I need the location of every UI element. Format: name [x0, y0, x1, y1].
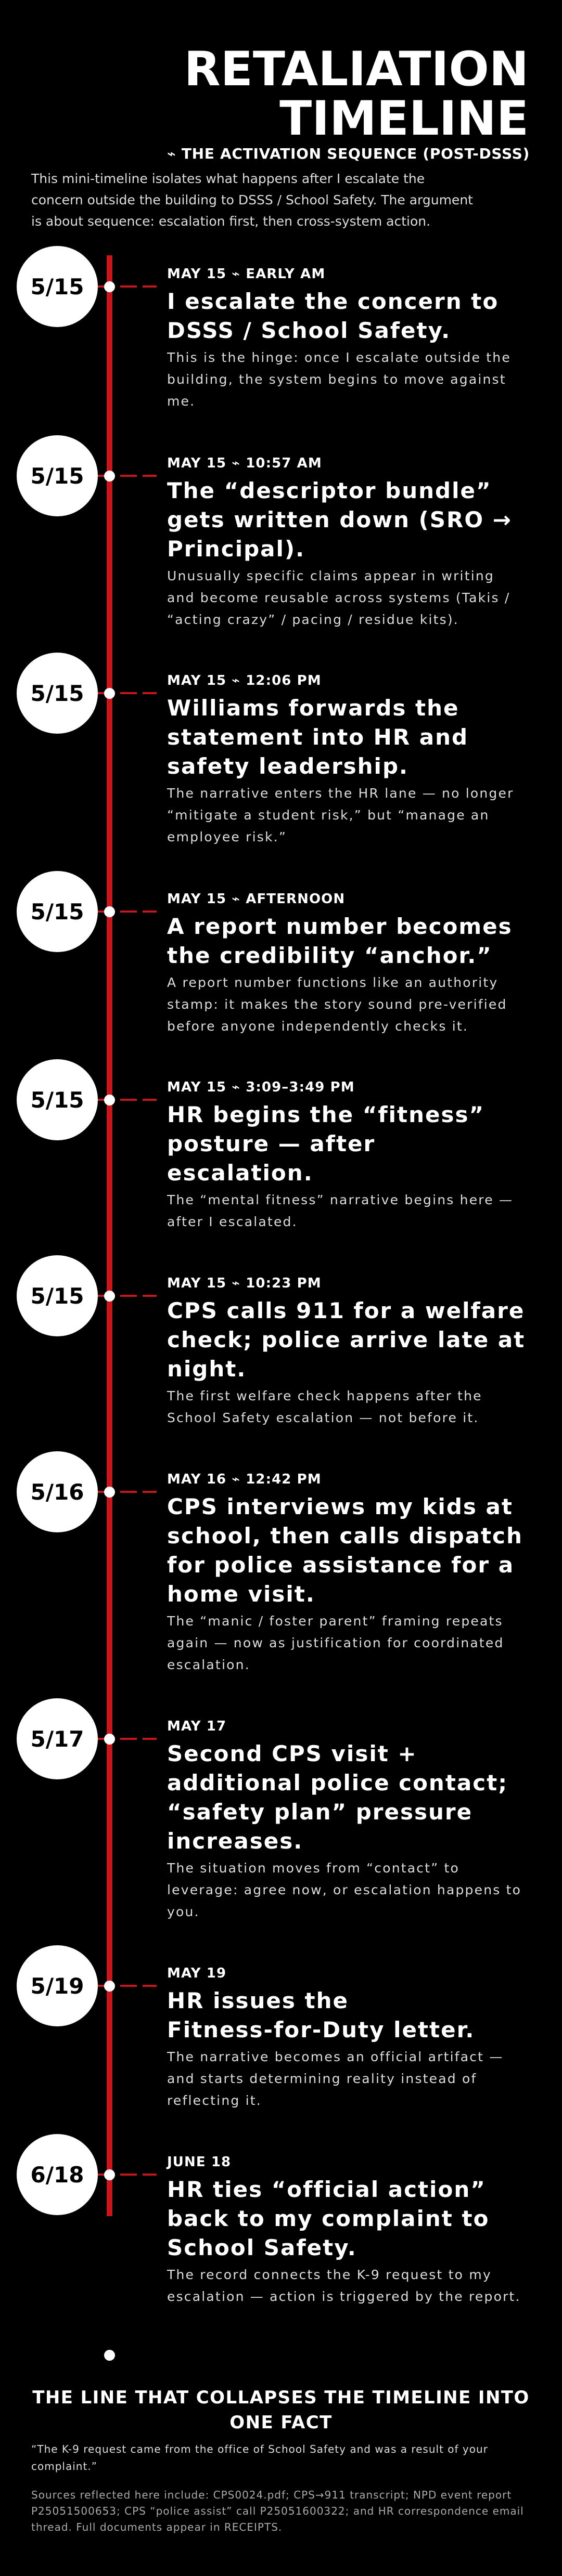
closing heading: [32, 2387, 530, 2433]
intro text: [31, 171, 473, 229]
entry text: A report number functions like an authority: [167, 975, 498, 990]
entry: 5/15 early am: [17, 246, 511, 409]
entry text: stamp: it makes the story sound pre-verified: [167, 997, 507, 1012]
entry text: The “descriptor bundle”: [167, 478, 492, 503]
entry: 5/16 12:42 pm: [17, 1451, 523, 1672]
entry text: MAY 15 ⌁ 12:06 PM: [167, 673, 322, 688]
date circle: 5/15: [30, 463, 84, 489]
entry text: Unusually specific claims appear in writing: [167, 568, 494, 583]
entry text: [167, 891, 513, 1034]
quote: complaint.”: [31, 2460, 97, 2473]
entry text: building, the system begins to move against: [167, 372, 506, 387]
entry text: increases.: [167, 1828, 303, 1854]
entry text: and starts determining reality instead of: [167, 2071, 477, 2086]
entry text: [167, 1719, 521, 1919]
entry text: again — now as justification for coordinated: [167, 1635, 504, 1650]
subtitle: ⌁ THE ACTIVATION SEQUENCE (POST-DSSS): [167, 145, 530, 162]
timeline dot: [104, 906, 115, 917]
entry text: escalation.: [167, 1160, 313, 1186]
timeline dot: [104, 1095, 115, 1105]
entry text: HR ties “official action”: [167, 2177, 486, 2202]
entry text: The record connects the K-9 request to my: [167, 2267, 492, 2282]
entry text: DSSS / School Safety.: [167, 318, 451, 343]
entry text: safety leadership.: [167, 753, 408, 779]
date circle: [17, 653, 98, 734]
entry text: me.: [167, 394, 195, 409]
intro text: concern outside the building to DSSS / School Safety. The argument: [31, 192, 473, 207]
entry: 6/18: [17, 2134, 521, 2304]
date circle: 6/18: [30, 2162, 84, 2187]
date circle: [17, 1255, 98, 1336]
entry text: [167, 1276, 525, 1425]
entry text: CPS interviews my kids at: [167, 1494, 513, 1519]
date circle: 5/15: [30, 1283, 84, 1308]
entry text: Williams forwards the: [167, 695, 459, 721]
date circle: [17, 1698, 98, 1779]
entry text: School Safety escalation — not before it.: [167, 1410, 479, 1425]
entry text: “mitigate a student risk,” but “manage an: [167, 808, 489, 823]
entry text: [167, 1966, 504, 2108]
timeline dot: [104, 1291, 115, 1302]
sources: P25051500653; CPS “police assist” call P25051600322; and HR correspondence email: [31, 2505, 524, 2517]
date circle: 5/15: [30, 899, 84, 925]
entry text: The narrative enters the HR lane — no longer: [167, 786, 514, 801]
entry text: school, then calls dispatch: [167, 1523, 523, 1549]
entry text: employee risk.”: [167, 829, 287, 844]
entry text: for police assistance for a: [167, 1552, 514, 1578]
entry text: after I escalated.: [167, 1214, 298, 1229]
entry text: leverage: agree now, or escalation happens to: [167, 1882, 521, 1897]
entry text: you.: [167, 1904, 200, 1919]
timeline dot: [104, 2169, 115, 2180]
entry text: The situation moves from “contact” to: [167, 1861, 459, 1876]
entry: 5/15 afternoon: [17, 871, 513, 1034]
timeline dot: [104, 1487, 115, 1498]
entry text: I escalate the concern to: [167, 289, 499, 314]
date circle: [17, 1945, 98, 2026]
entry text: night.: [167, 1356, 246, 1382]
entry: 5/17: [17, 1698, 521, 1919]
entry text: HR issues the: [167, 1988, 349, 2013]
timeline dot: [104, 1734, 115, 1745]
entry text: [167, 1472, 523, 1672]
date circle: 5/15: [30, 680, 84, 706]
entry text: MAY 19: [167, 1966, 226, 1981]
entry text: The narrative becomes an official artifact —: [167, 2049, 504, 2064]
entry text: [167, 456, 512, 627]
entry text: MAY 15 ⌁ 3:09–3:49 PM: [167, 1079, 355, 1095]
entry text: gets written down (SRO →: [167, 507, 512, 532]
entry text: School Safety.: [167, 2235, 357, 2260]
entry text: additional police contact;: [167, 1770, 508, 1796]
date circle: 5/17: [30, 1726, 84, 1751]
date circle: 5/15: [30, 1087, 84, 1113]
entry text: “acting crazy” / pacing / residue kits).: [167, 612, 459, 627]
entry text: MAY 15 ⌁ AFTERNOON: [167, 891, 345, 907]
quote: “The K-9 request came from the office of School Safety and was a result of your: [31, 2443, 488, 2455]
date circle: [17, 246, 98, 327]
entry: 5/15 3:09-3:49 pm: [17, 1059, 513, 1229]
entry text: back to my complaint to: [167, 2206, 489, 2231]
entry text: CPS calls 911 for a welfare: [167, 1298, 525, 1323]
entry: 5/15 10:57 am: [17, 435, 512, 627]
entry text: The first welfare check happens after the: [167, 1388, 482, 1403]
timeline dot: [104, 1981, 115, 1992]
entry: 5/15 10:23 pm: [17, 1255, 525, 1425]
entry text: and become reusable across systems (Takis /: [167, 590, 510, 605]
entry text: Principal).: [167, 536, 305, 562]
entry text: check; police arrive late at: [167, 1327, 525, 1352]
entry text: escalation.: [167, 1657, 250, 1672]
entry text: [167, 1079, 513, 1229]
date circle: 5/15: [30, 274, 84, 300]
entry text: The “mental fitness” narrative begins here —: [167, 1192, 513, 1207]
timeline dot: [104, 471, 115, 482]
entry text: HR begins the “fitness”: [167, 1102, 484, 1127]
timeline red line: [107, 255, 112, 2216]
entry text: [167, 673, 514, 844]
entry text: MAY 15 ⌁ 10:23 PM: [167, 1276, 322, 1291]
quote: [31, 2443, 488, 2473]
timeline dot: [104, 688, 115, 699]
entry text: escalation — action is triggered by the report.: [167, 2289, 521, 2304]
intro text: is about sequence: escalation first, then cross-system action.: [31, 214, 430, 229]
entry text: statement into HR and: [167, 724, 468, 750]
sources: Sources reflected here include: CPS0024.pdf; CPS→911 transcript; NPD event report: [31, 2489, 512, 2501]
closing heading: THE LINE THAT COLLAPSES THE TIMELINE INTO: [32, 2387, 530, 2408]
title: TIMELINE: [279, 92, 529, 146]
entry text: MAY 17: [167, 1719, 226, 1734]
final timeline dot: [104, 2350, 115, 2361]
entry text: [167, 266, 511, 409]
entry text: reflecting it.: [167, 2093, 262, 2108]
entry text: This is the hinge: once I escalate outside the: [167, 350, 511, 365]
entry text: MAY 15 ⌁ 10:57 AM: [167, 456, 322, 471]
entry text: posture — after: [167, 1131, 375, 1156]
title: RETALIATION: [184, 42, 529, 97]
entry text: Second CPS visit +: [167, 1741, 417, 1766]
entry text: JUNE 18: [167, 2154, 231, 2170]
entry text: A report number becomes: [167, 914, 513, 939]
timeline dot: [104, 281, 115, 292]
entry text: Fitness-for-Duty letter.: [167, 2017, 475, 2042]
entry text: [167, 2154, 521, 2304]
date circle: [17, 435, 98, 516]
sources: [31, 2489, 524, 2533]
closing heading: ONE FACT: [229, 2412, 333, 2433]
sources: thread. Full documents appear in RECEIPTS.: [31, 2521, 282, 2533]
date circle: [17, 2134, 98, 2215]
entry text: The “manic / foster parent” framing repeats: [167, 1614, 503, 1629]
entry: 5/15 12:06 pm: [17, 653, 514, 844]
entry text: MAY 15 ⌁ EARLY AM: [167, 266, 325, 282]
date circle: [17, 1451, 98, 1532]
entry text: MAY 16 ⌁ 12:42 PM: [167, 1472, 322, 1487]
entry text: before anyone independently checks it.: [167, 1019, 468, 1034]
title: [184, 42, 529, 146]
entry text: home visit.: [167, 1581, 315, 1607]
date circle: [17, 1059, 98, 1140]
entry text: the credibility “anchor.”: [167, 943, 492, 968]
entry: 5/19: [17, 1945, 504, 2108]
date circle: 5/19: [30, 1973, 84, 1999]
date circle: 5/16: [30, 1479, 84, 1505]
entry text: “safety plan” pressure: [167, 1799, 472, 1825]
date circle: [17, 871, 98, 952]
intro text: This mini-timeline isolates what happens after I escalate the: [31, 171, 425, 186]
